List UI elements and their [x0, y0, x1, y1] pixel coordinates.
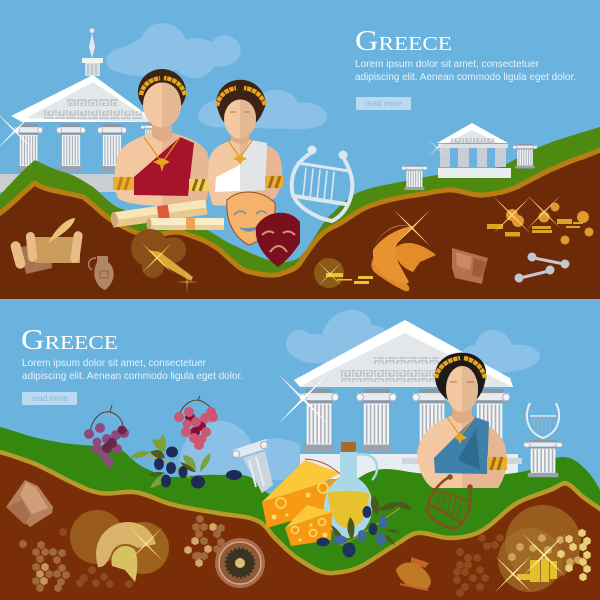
player wreath: [436, 358, 485, 378]
mask: tragedy: [256, 213, 300, 267]
artifact: bones: [516, 254, 568, 281]
sparkle on temple bottom: [252, 348, 354, 450]
lyre: large white: [292, 148, 352, 221]
cloud behind temple and man: [106, 23, 241, 78]
cloud left small: [286, 330, 314, 358]
text block: lorem bottom: Lorem ipsum dolor sit amet, consectetuer: [22, 358, 207, 369]
artifact: broken capital fragment: [452, 248, 488, 284]
artifact: amphora: [89, 256, 114, 290]
mask: comedy: [227, 192, 275, 245]
pediment: [11, 75, 149, 122]
woman necklace: [227, 139, 253, 165]
figure: lyre player: [417, 353, 507, 488]
heading: Greece top: Greece: [355, 26, 452, 57]
panel: top banner: [0, 0, 600, 306]
hill: top green: [0, 127, 600, 299]
blue toga: [434, 417, 489, 474]
artifact: glowing gold treasure: [453, 505, 591, 600]
cheese: large wedge: [262, 459, 345, 528]
cloud behind temple: [291, 310, 387, 363]
olive branch: right: [316, 496, 412, 558]
artifact: capital fragment bottom left: [6, 480, 53, 527]
column and small lyre: [523, 403, 563, 477]
heading: Greece bottom: Greece: [21, 325, 118, 356]
artifact: golden helmet with glow: [70, 510, 180, 582]
honeycomb cluster: left: [19, 528, 133, 592]
column: fallen: [232, 439, 273, 493]
scroll 2: [146, 218, 224, 230]
temple: small right: [420, 123, 511, 178]
armbands: [113, 177, 209, 191]
statue on roof: [82, 28, 103, 76]
man head: [138, 69, 186, 142]
woman hair and head: [216, 80, 266, 144]
text block: lorem top: Lorem ipsum dolor sit amet, consectetuer: [355, 59, 540, 70]
necklace: [144, 137, 180, 172]
olive branch: left: [130, 434, 242, 488]
woman armband: [265, 176, 283, 188]
woman body: [208, 138, 282, 206]
grapes: pink: [174, 396, 218, 450]
button: read more top: [356, 97, 411, 110]
button: read more top: read more: [365, 99, 402, 108]
red toga: [134, 137, 194, 196]
artifact: parchment scrolls: [10, 218, 83, 274]
man body: [115, 130, 210, 206]
honeycomb cluster: centre: [184, 515, 225, 567]
woman wreath: [217, 88, 265, 106]
lyre: brown: [428, 476, 472, 528]
temple platform: [0, 174, 122, 192]
cheese: small wedge: [285, 505, 332, 546]
bottom colonnade: [299, 389, 510, 452]
colonnade: [15, 124, 165, 172]
figure: man with laurel wreath: [113, 69, 210, 207]
olive oil bottle: [324, 442, 377, 538]
artifact: gold coins and bars: [475, 178, 594, 252]
temple: large bottom: [252, 320, 522, 479]
man wreath: [141, 78, 185, 95]
hill: bottom green: [0, 427, 600, 600]
artifact: glowing coins lower centre: [306, 250, 373, 298]
text block: lorem bottom: adipiscing elit. Aenean commodo ligula eget dolor.: [22, 371, 243, 382]
panel: bottom banner: [0, 299, 600, 600]
text block: lorem top: adipiscing elit. Aenean commodo ligula eget dolor.: [355, 72, 576, 83]
cloud right of temple: [461, 330, 540, 373]
player hair and head: [435, 353, 486, 423]
grapes: purple: [84, 405, 129, 467]
button: read more bottom: read more: [31, 394, 68, 403]
button: read more bottom: [22, 392, 77, 405]
artifact: bronze lebes vase: [396, 557, 431, 590]
artifact: glowing gold relic: [126, 227, 211, 306]
artifact: spartan helmet orange: [371, 191, 449, 291]
cloud behind woman: [198, 90, 327, 129]
column: left of small temple: [402, 165, 427, 190]
column: right of small temple: [513, 144, 537, 168]
sparkle on temple: [0, 94, 52, 168]
bottom pediment: [294, 320, 513, 387]
bottom platform: [300, 454, 522, 479]
scroll 1: [110, 199, 208, 228]
cloud behind fallen column: [180, 421, 300, 480]
player armband: [487, 457, 507, 470]
artifact: round shield: [215, 538, 265, 588]
player body: [417, 412, 507, 488]
figure: woman with laurel wreath: [208, 80, 283, 206]
temple: large left: [0, 28, 165, 192]
underground: bottom soil: [0, 451, 600, 600]
underground: top soil: [0, 149, 600, 305]
player necklace: [447, 417, 475, 444]
white toga: [215, 140, 267, 192]
